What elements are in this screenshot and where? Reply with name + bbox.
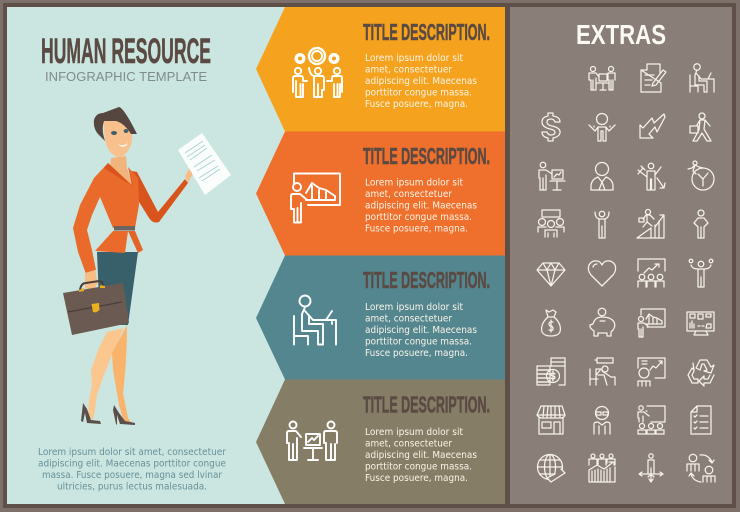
- icon: person at desk small: [690, 64, 714, 92]
- step 2 body: Lorem ipsum dolor sit: [365, 178, 463, 188]
- step 4 body: Lorem ipsum dolor sit: [365, 427, 463, 438]
- step 3 title: TITLE DESCRIPTION.: [363, 267, 490, 293]
- panel: step 1 orange: [256, 7, 505, 132]
- icon: person with directional arrows: [639, 454, 663, 482]
- step 3 body: [365, 302, 477, 359]
- step 3 body: amet, consectetuer: [365, 314, 453, 324]
- illustration: businesswoman: [63, 107, 231, 425]
- icon: runner up growth chart: [637, 210, 664, 238]
- icon: dollar sign: [542, 113, 560, 141]
- icon: document and pencil: [641, 64, 666, 92]
- icon: person with crossing arrows: [638, 163, 665, 190]
- icon: person bust: [591, 162, 613, 190]
- icon: person with coins: [689, 259, 713, 287]
- icon: bust with chart board: [638, 358, 665, 386]
- subtitle: INFOGRAPHIC TEMPLATE: [45, 69, 207, 84]
- text block: left description: [38, 447, 227, 492]
- icon: person shrugging: [589, 114, 615, 141]
- icon: person with glasses: [594, 406, 610, 434]
- icon: coin stacks: [537, 358, 565, 385]
- step 1 body: amet, consectetuer: [365, 64, 453, 76]
- panel: step 3 teal: [256, 256, 505, 380]
- step 4 body: amet, consectetuer: [365, 438, 453, 450]
- step 4 body: [365, 427, 477, 484]
- icon: money bag: [542, 310, 560, 336]
- icon: recycling arrows: [688, 360, 714, 386]
- text block: left description: Lorem ipsum dolor sit amet, consectetuer: [38, 447, 227, 458]
- panel: extras background: [510, 7, 732, 504]
- icon: heart: [588, 261, 616, 286]
- step 3 body: porttitor congue massa.: [365, 336, 472, 348]
- icon: board with audience: [638, 259, 665, 287]
- icon: person at desk: [294, 296, 336, 344]
- step 1 body: Fusce posuere, magna.: [365, 99, 468, 110]
- step 1 body: Lorem ipsum dolor sit: [365, 53, 463, 64]
- step 2 body: [365, 178, 477, 234]
- step 1 body: porttitor congue massa.: [365, 88, 472, 98]
- step 3 body: Lorem ipsum dolor sit: [365, 302, 463, 313]
- icon: presenter and chart: [638, 309, 665, 337]
- text block: left description: massa. Fusce posuere, magna sed lvinar: [42, 470, 223, 481]
- step 4 body: adipiscing elit. Maecenas: [365, 450, 477, 461]
- panel: step 4 khaki: [256, 380, 505, 504]
- icon: runner and clock: [688, 161, 714, 190]
- step 2 title: TITLE DESCRIPTION.: [363, 143, 490, 169]
- icon: teacher and audience: [638, 406, 665, 434]
- step 2 body: amet, consectetuer: [365, 189, 453, 200]
- step 4 body: porttitor congue massa.: [365, 462, 472, 472]
- text block: left description: adipiscing elit. Maecenas porttitor congue: [38, 458, 226, 470]
- icon: checklist document: [691, 406, 711, 434]
- heading: human resource: HUMAN RESOURCE: [41, 32, 211, 71]
- icon: diamond: [537, 263, 565, 286]
- step 2 body: adipiscing elit. Maecenas: [365, 200, 477, 212]
- icon: meeting at screen: [589, 66, 615, 90]
- step 4 title: TITLE DESCRIPTION.: [363, 392, 490, 418]
- icon: two people with screen: [287, 422, 337, 460]
- icon: piggy bank: [590, 308, 615, 336]
- icon: globe with map: [538, 454, 565, 482]
- icon: group with speech bubble: [538, 210, 564, 237]
- icon: dashboard monitor: [687, 312, 714, 335]
- panel: left background: [7, 7, 505, 504]
- icon: two people exchange cycle: [687, 454, 715, 482]
- step 2 body: porttitor congue massa.: [365, 212, 472, 223]
- icon: team with gears: [293, 48, 342, 97]
- icon: presenter with chart board: [291, 174, 340, 222]
- heading: extras: EXTRAS: [576, 19, 666, 50]
- icon: team above growth chart: [589, 454, 615, 482]
- icon: presenter and monitor: [539, 162, 565, 190]
- icon: falling zigzag arrow: [640, 114, 665, 138]
- step 2 body: Fusce posuere, magna.: [365, 224, 468, 234]
- icon: walking with briefcase: [690, 113, 711, 141]
- step 4 body: Fusce posuere, magna.: [365, 473, 468, 484]
- icon: person arms raised: [595, 211, 609, 238]
- text block: left description: ultricies, purus lectus malesuada.: [57, 482, 207, 492]
- step 3 body: Fusce posuere, magna.: [365, 348, 468, 359]
- step 3 body: adipiscing elit. Maecenas: [365, 325, 477, 336]
- step 1 title: TITLE DESCRIPTION.: [363, 19, 490, 45]
- step 1 body: adipiscing elit. Maecenas: [365, 76, 477, 87]
- icon: shop: [537, 406, 565, 434]
- panel: step 2 red-orange: [256, 132, 505, 256]
- step 1 body: [365, 53, 477, 110]
- icon: person hands on hips: [694, 210, 708, 238]
- icon: tired worker with battery: [590, 358, 615, 385]
